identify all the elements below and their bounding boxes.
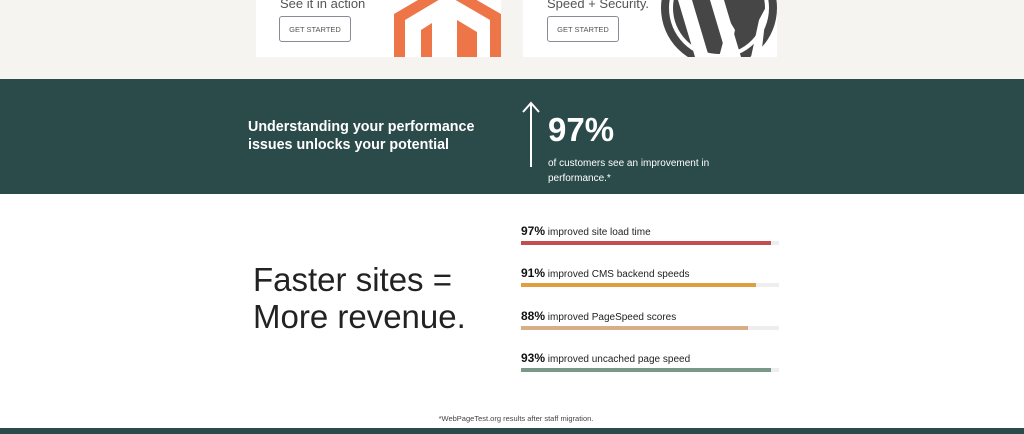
text: customers: performance.*	[548, 173, 611, 184]
card: magento: GET STARTED	[289, 24, 341, 34]
green band	[0, 79, 1024, 194]
card: wordpress	[523, 0, 777, 57]
top band	[0, 0, 1024, 79]
bottom band	[0, 428, 1024, 434]
bar: cms	[521, 266, 779, 287]
heading: understanding	[248, 119, 474, 153]
icon: magento logo	[394, 0, 501, 57]
bar: cms: 91% improved CMS backend speeds	[521, 266, 690, 280]
bar chart	[521, 224, 779, 372]
heading: understanding: Understanding your performance	[248, 119, 474, 135]
heading: faster sites: Faster sites =	[253, 261, 452, 298]
bar: site load	[521, 224, 779, 245]
footnote: *WebPageTest.org results after staff migration.	[439, 414, 593, 423]
stat: 97%: 97%	[548, 111, 614, 148]
heading: faster sites	[253, 261, 466, 335]
bar: pagespeed: 88% improved PageSpeed scores	[521, 309, 676, 323]
text: customers: of customers see an improvement in	[548, 158, 709, 169]
heading: faster sites: More revenue.	[253, 298, 466, 335]
card: magento	[256, 0, 501, 57]
heading: understanding: issues unlocks your potential	[248, 137, 449, 153]
arrow: up	[522, 102, 540, 167]
bar: site load: 97% improved site load time	[521, 224, 651, 238]
text: customers	[548, 158, 709, 184]
bar: pagespeed	[521, 309, 779, 330]
bar: uncached: 93% improved uncached page speed	[521, 351, 690, 365]
card: wordpress: GET STARTED	[557, 24, 609, 34]
bar: uncached	[521, 351, 779, 372]
icon: wordpress logo	[661, 0, 777, 57]
